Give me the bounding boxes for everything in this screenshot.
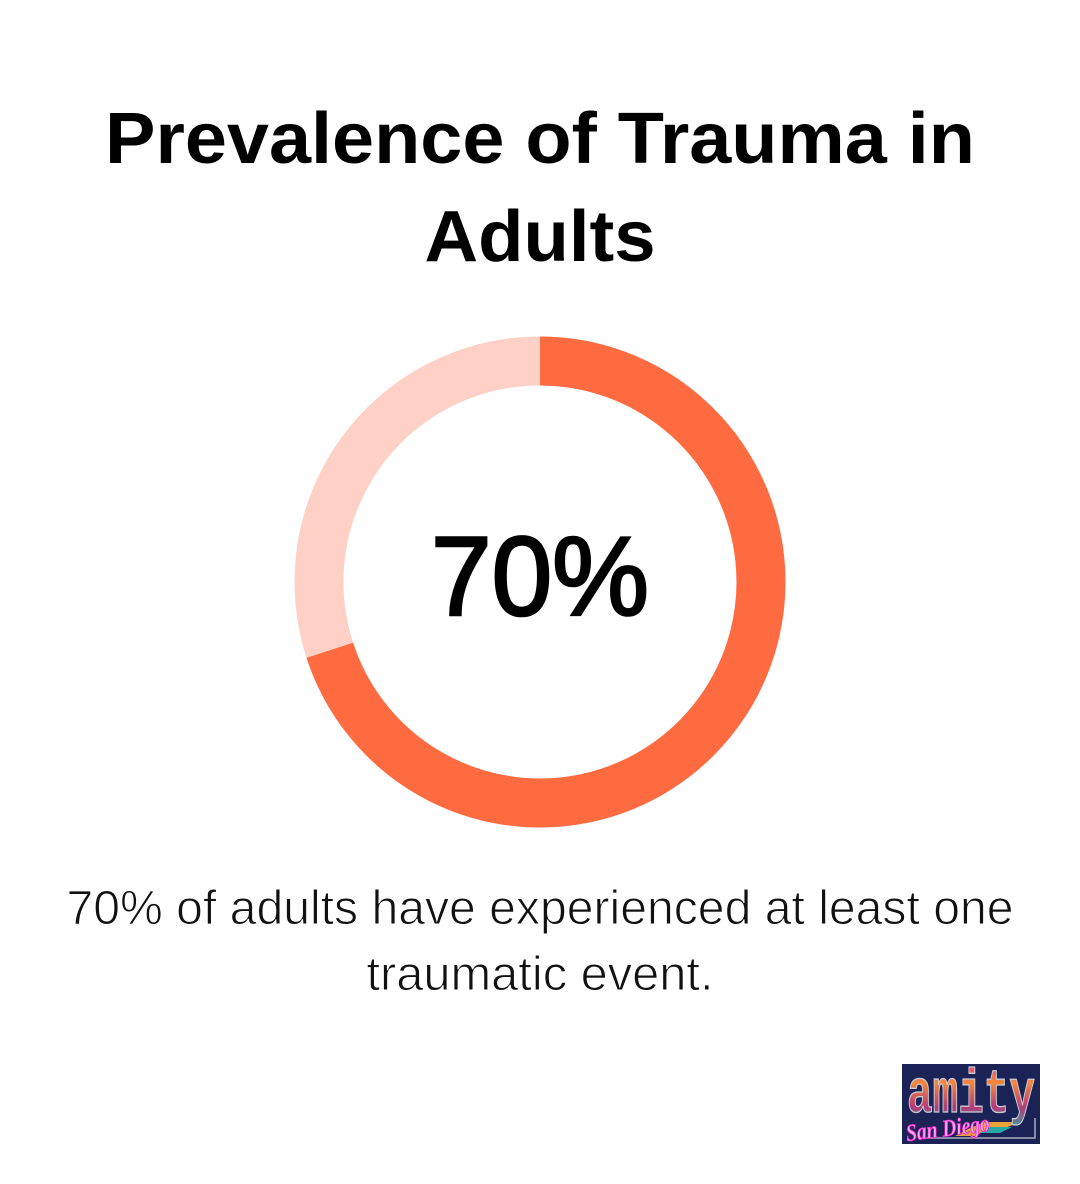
donut value arc: 70 percent bbox=[330, 361, 761, 803]
logo: Amity San Diego bbox=[902, 1062, 1040, 1147]
donut remainder: 30 percent bbox=[319, 361, 761, 803]
title: Prevalence of Trauma in bbox=[105, 99, 975, 179]
donut chart: 70 percent bbox=[319, 361, 761, 803]
description text: traumatic event. bbox=[366, 948, 714, 1001]
logo outline detail bbox=[918, 1118, 1035, 1138]
description text bbox=[66, 882, 1014, 1001]
title: Adults bbox=[424, 197, 656, 277]
logo background bbox=[902, 1064, 1040, 1144]
logo wordmark: amity bbox=[907, 1062, 1035, 1131]
donut centre value: 70% bbox=[431, 514, 649, 639]
logo beach stripes bbox=[955, 1122, 1020, 1136]
logo script: San Diego bbox=[905, 1111, 991, 1147]
title bbox=[105, 99, 975, 277]
description text: 70% of adults have experienced at least one bbox=[66, 882, 1014, 935]
